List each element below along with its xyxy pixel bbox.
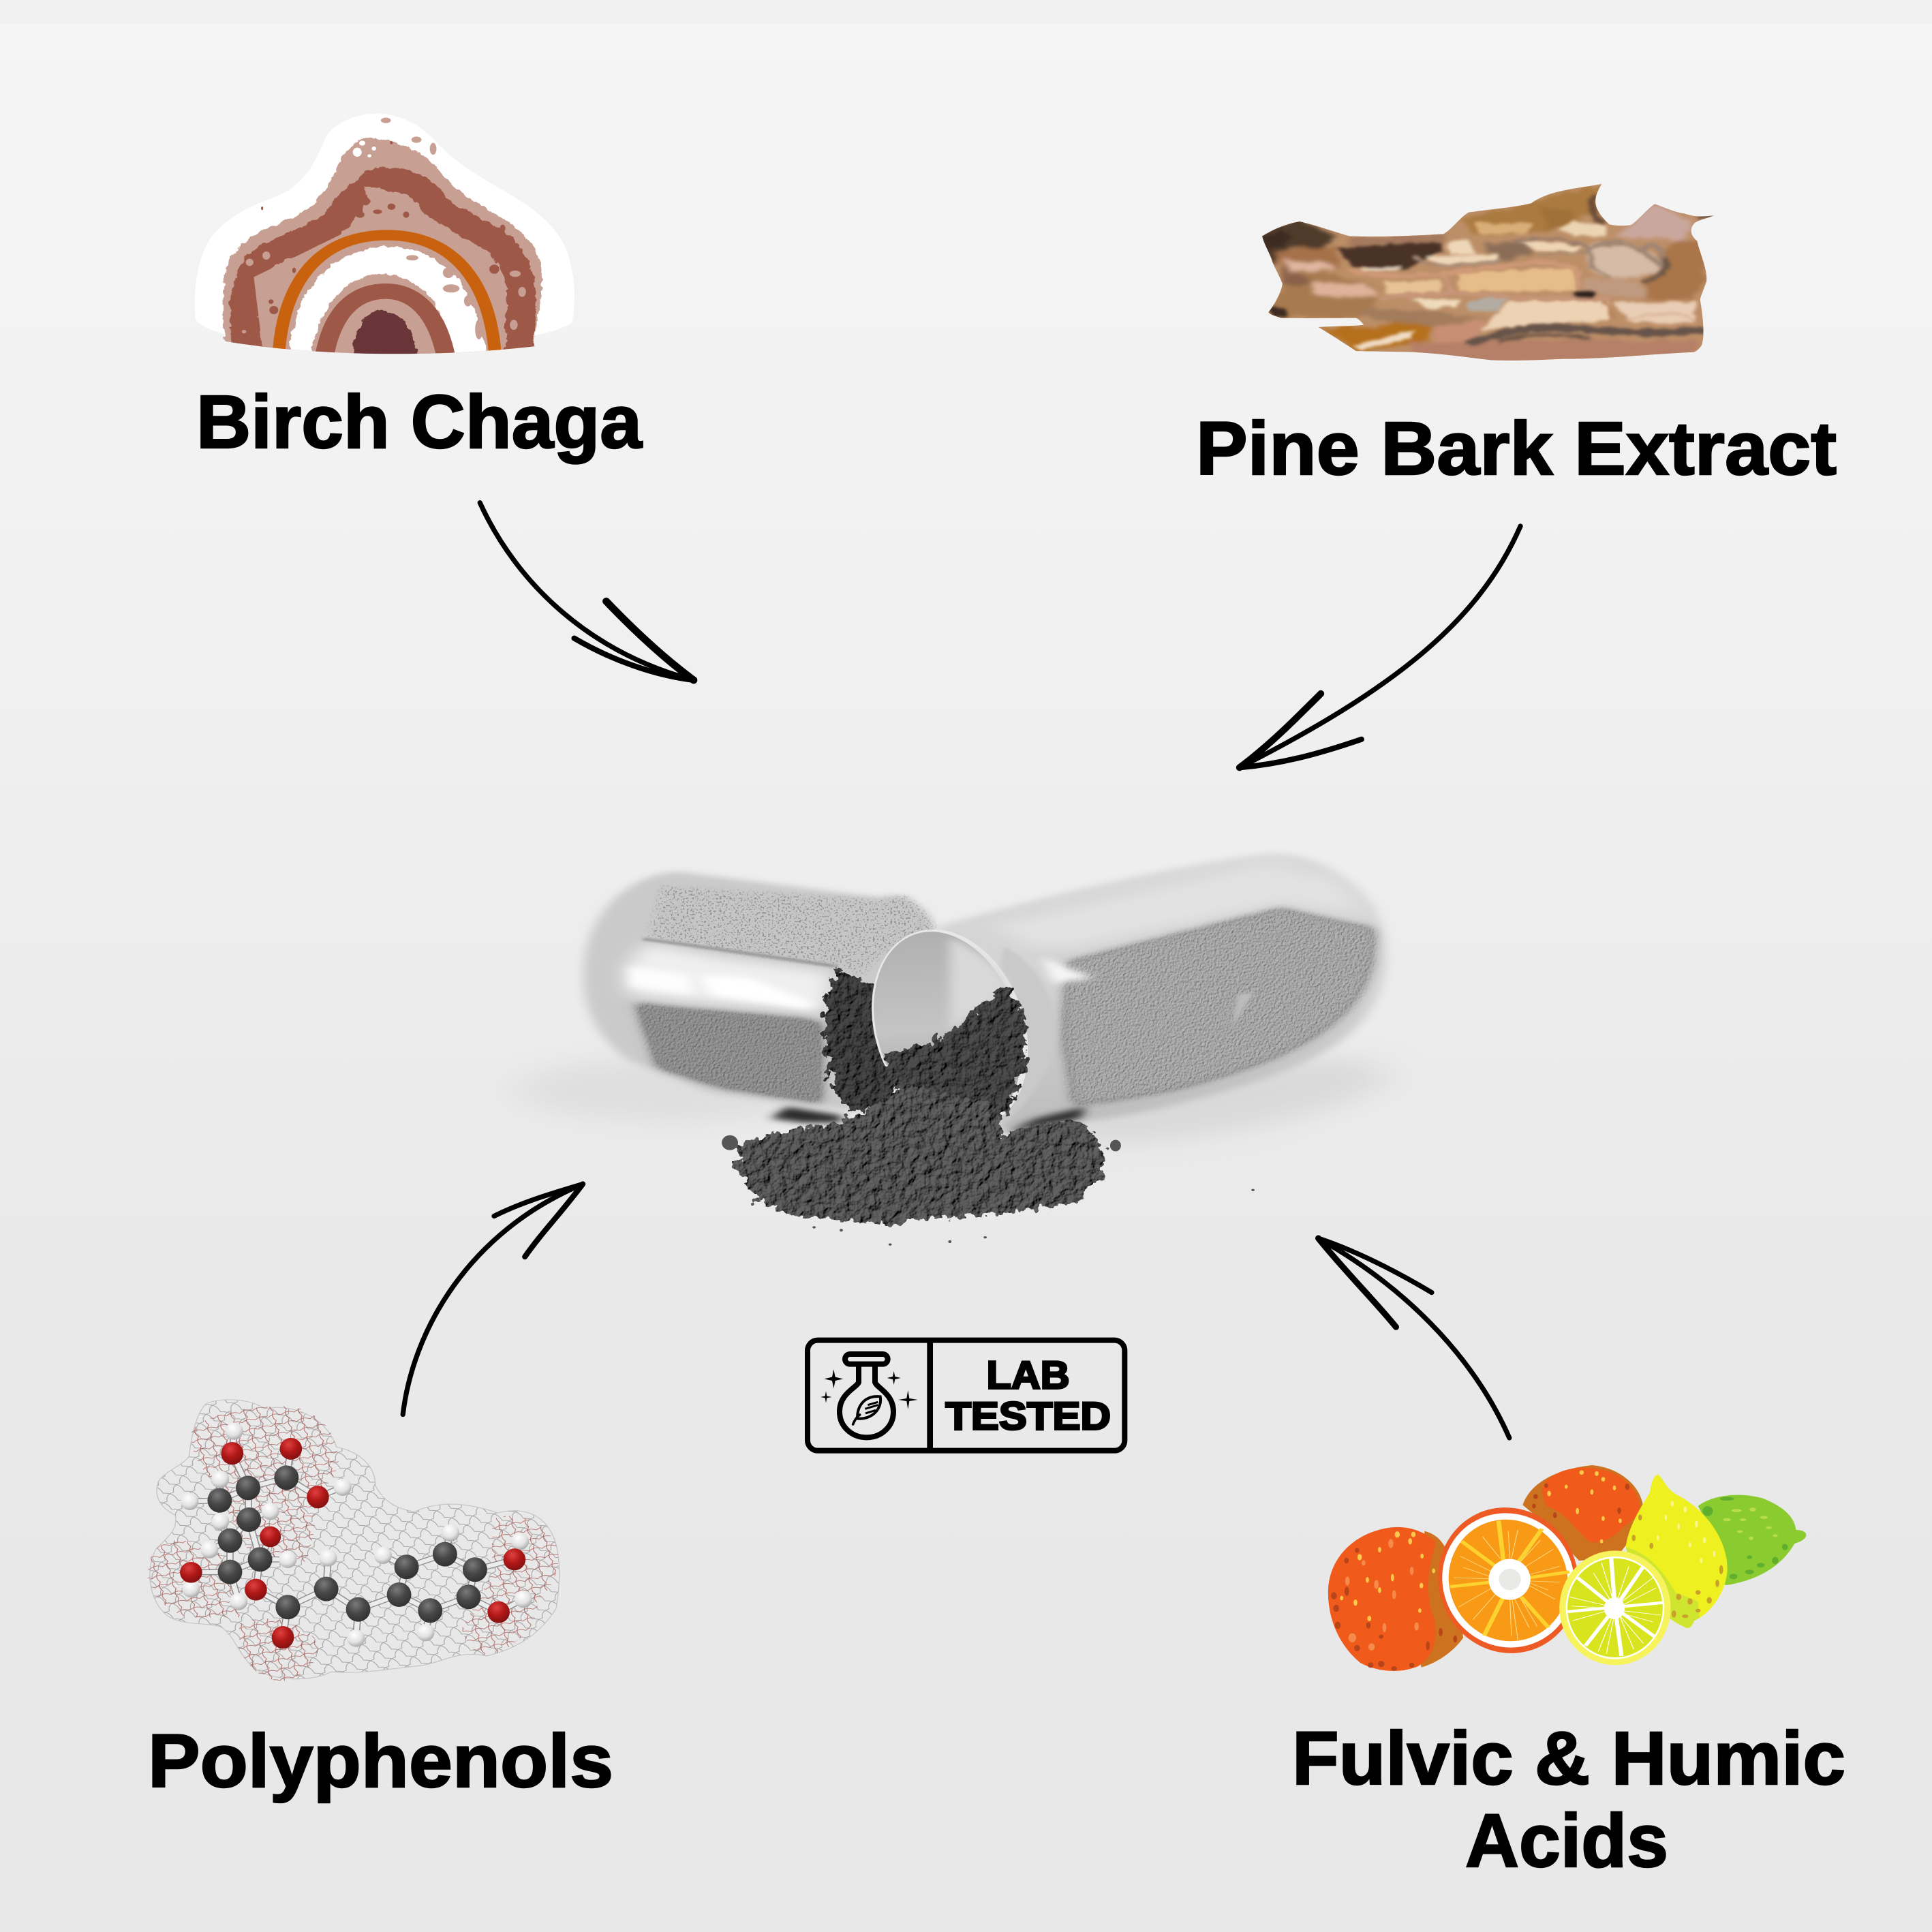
icon: citrus fruit group — [1328, 1465, 1806, 1671]
badge text line two: TESTED — [945, 1394, 1111, 1438]
arrow: Pine Bark Extract to capsule — [1240, 526, 1520, 767]
chaga white outer edge — [195, 114, 574, 336]
heading: Polyphenols: Polyphenols — [148, 1719, 613, 1803]
arrow: Fulvic and Humic Acids to capsule — [1319, 1238, 1509, 1438]
badge frame — [808, 1340, 1124, 1451]
scattered powder specks — [722, 1135, 1255, 1246]
badge text: LAB — [987, 1353, 1070, 1397]
back orange — [1522, 1465, 1643, 1561]
bark watercolor patches — [1253, 183, 1713, 363]
lime — [1698, 1495, 1806, 1585]
molecule bonds — [189, 1431, 523, 1638]
heading: Pine Bark Extract: Pine Bark Extract — [1196, 407, 1837, 491]
capsule shadows — [515, 1041, 1405, 1161]
spilled powder pile — [735, 1087, 1105, 1225]
heading: Fulvic and Humic Acids — [1292, 1717, 1845, 1883]
right capsule body — [939, 853, 1387, 1130]
chaga rings — [223, 138, 542, 368]
molecule red mesh patches — [147, 1406, 558, 1681]
icon: polyphenol molecule — [147, 1400, 559, 1681]
shadow under capsules — [771, 1107, 841, 1122]
icon: birch chaga rainbow mushroom — [195, 114, 574, 368]
left capsule body — [583, 872, 934, 1113]
front orange — [1328, 1527, 1463, 1671]
orange slice — [1433, 1505, 1584, 1656]
oxygen atoms — [180, 1438, 525, 1649]
molecule gray mesh surface — [150, 1400, 559, 1679]
lemon — [1621, 1474, 1728, 1634]
heading: Fulvic and Humic Acids: Acids — [1465, 1799, 1668, 1883]
hydrogen atoms — [181, 1422, 532, 1647]
heading: Birch Chaga: Birch Chaga — [196, 380, 643, 464]
heading: Fulvic and Humic Acids: Fulvic & Humic — [1292, 1717, 1845, 1800]
chaga flecks — [242, 118, 526, 339]
lemon slice — [1559, 1550, 1671, 1665]
arrow: Polyphenols to capsule — [403, 1184, 583, 1415]
photo: open capsule spilling dark powder — [515, 853, 1405, 1246]
bark base shape — [1262, 184, 1714, 361]
badge divider — [927, 1340, 933, 1451]
capsule opening interiors — [825, 969, 895, 1111]
icon: watercolor pine bark — [1253, 183, 1714, 363]
badge: lab tested — [808, 1340, 1124, 1451]
arrow: Birch Chaga to capsule — [480, 503, 694, 680]
carbon atoms — [207, 1465, 487, 1623]
icon: flask with leaf — [821, 1354, 918, 1437]
